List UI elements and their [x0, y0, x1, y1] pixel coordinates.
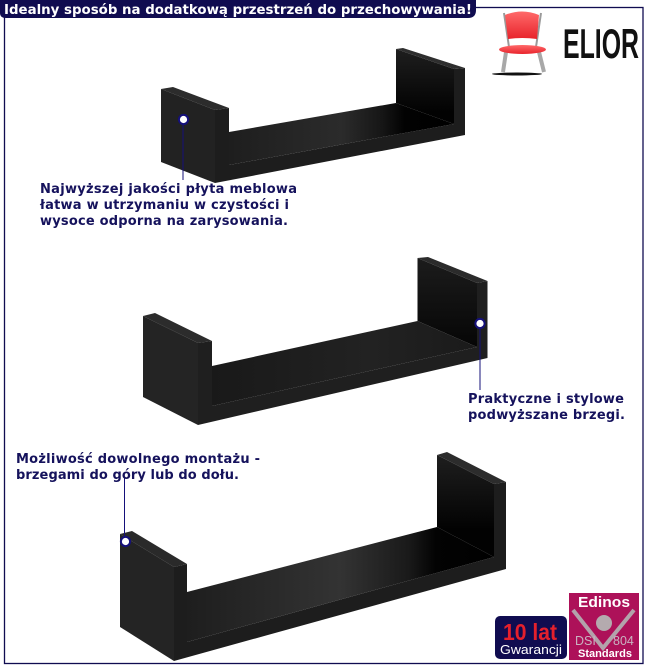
shelf 1 [161, 48, 465, 183]
badge: Edinos standards: Edinos [578, 594, 630, 611]
marker [121, 477, 130, 546]
callout 3 [16, 452, 260, 546]
callout text: łatwa w utrzymaniu w czystości i [39, 198, 289, 213]
marker [475, 319, 485, 390]
callout text [468, 392, 625, 423]
shelf 2 [143, 257, 488, 425]
callout text: Praktyczne i stylowe [468, 392, 624, 407]
callout text: Możliwość dowolnego montażu - [16, 452, 260, 467]
badge: 10 year warranty: 10 lat [503, 619, 557, 645]
badge: 10 year warranty [495, 616, 567, 659]
logo: Elior [492, 12, 639, 76]
callout 2 [468, 319, 625, 423]
callout 1 [39, 115, 297, 229]
callout text: Najwyższej jakości płyta meblowa [40, 182, 297, 197]
badge: Edinos standards [569, 593, 639, 660]
badge: Edinos standards: 804 [613, 634, 634, 648]
callout text [39, 182, 297, 229]
marker [179, 115, 188, 180]
callout text [16, 452, 260, 483]
badge: Edinos standards: Standards [578, 648, 632, 660]
callout text: wysoce odporna na zarysowania. [40, 214, 288, 229]
badge: Edinos standards: DSI [575, 634, 596, 648]
badge: 10 year warranty: Gwarancji [500, 643, 562, 657]
shelf 3 [120, 452, 506, 661]
title: Idealny sposób na dodatkową przestrzeń do przechowywania! [4, 3, 472, 18]
callout text: podwyższane brzegi. [468, 408, 625, 423]
icon: red chair [492, 12, 546, 76]
callout text: brzegami do góry lub do dołu. [16, 468, 239, 483]
